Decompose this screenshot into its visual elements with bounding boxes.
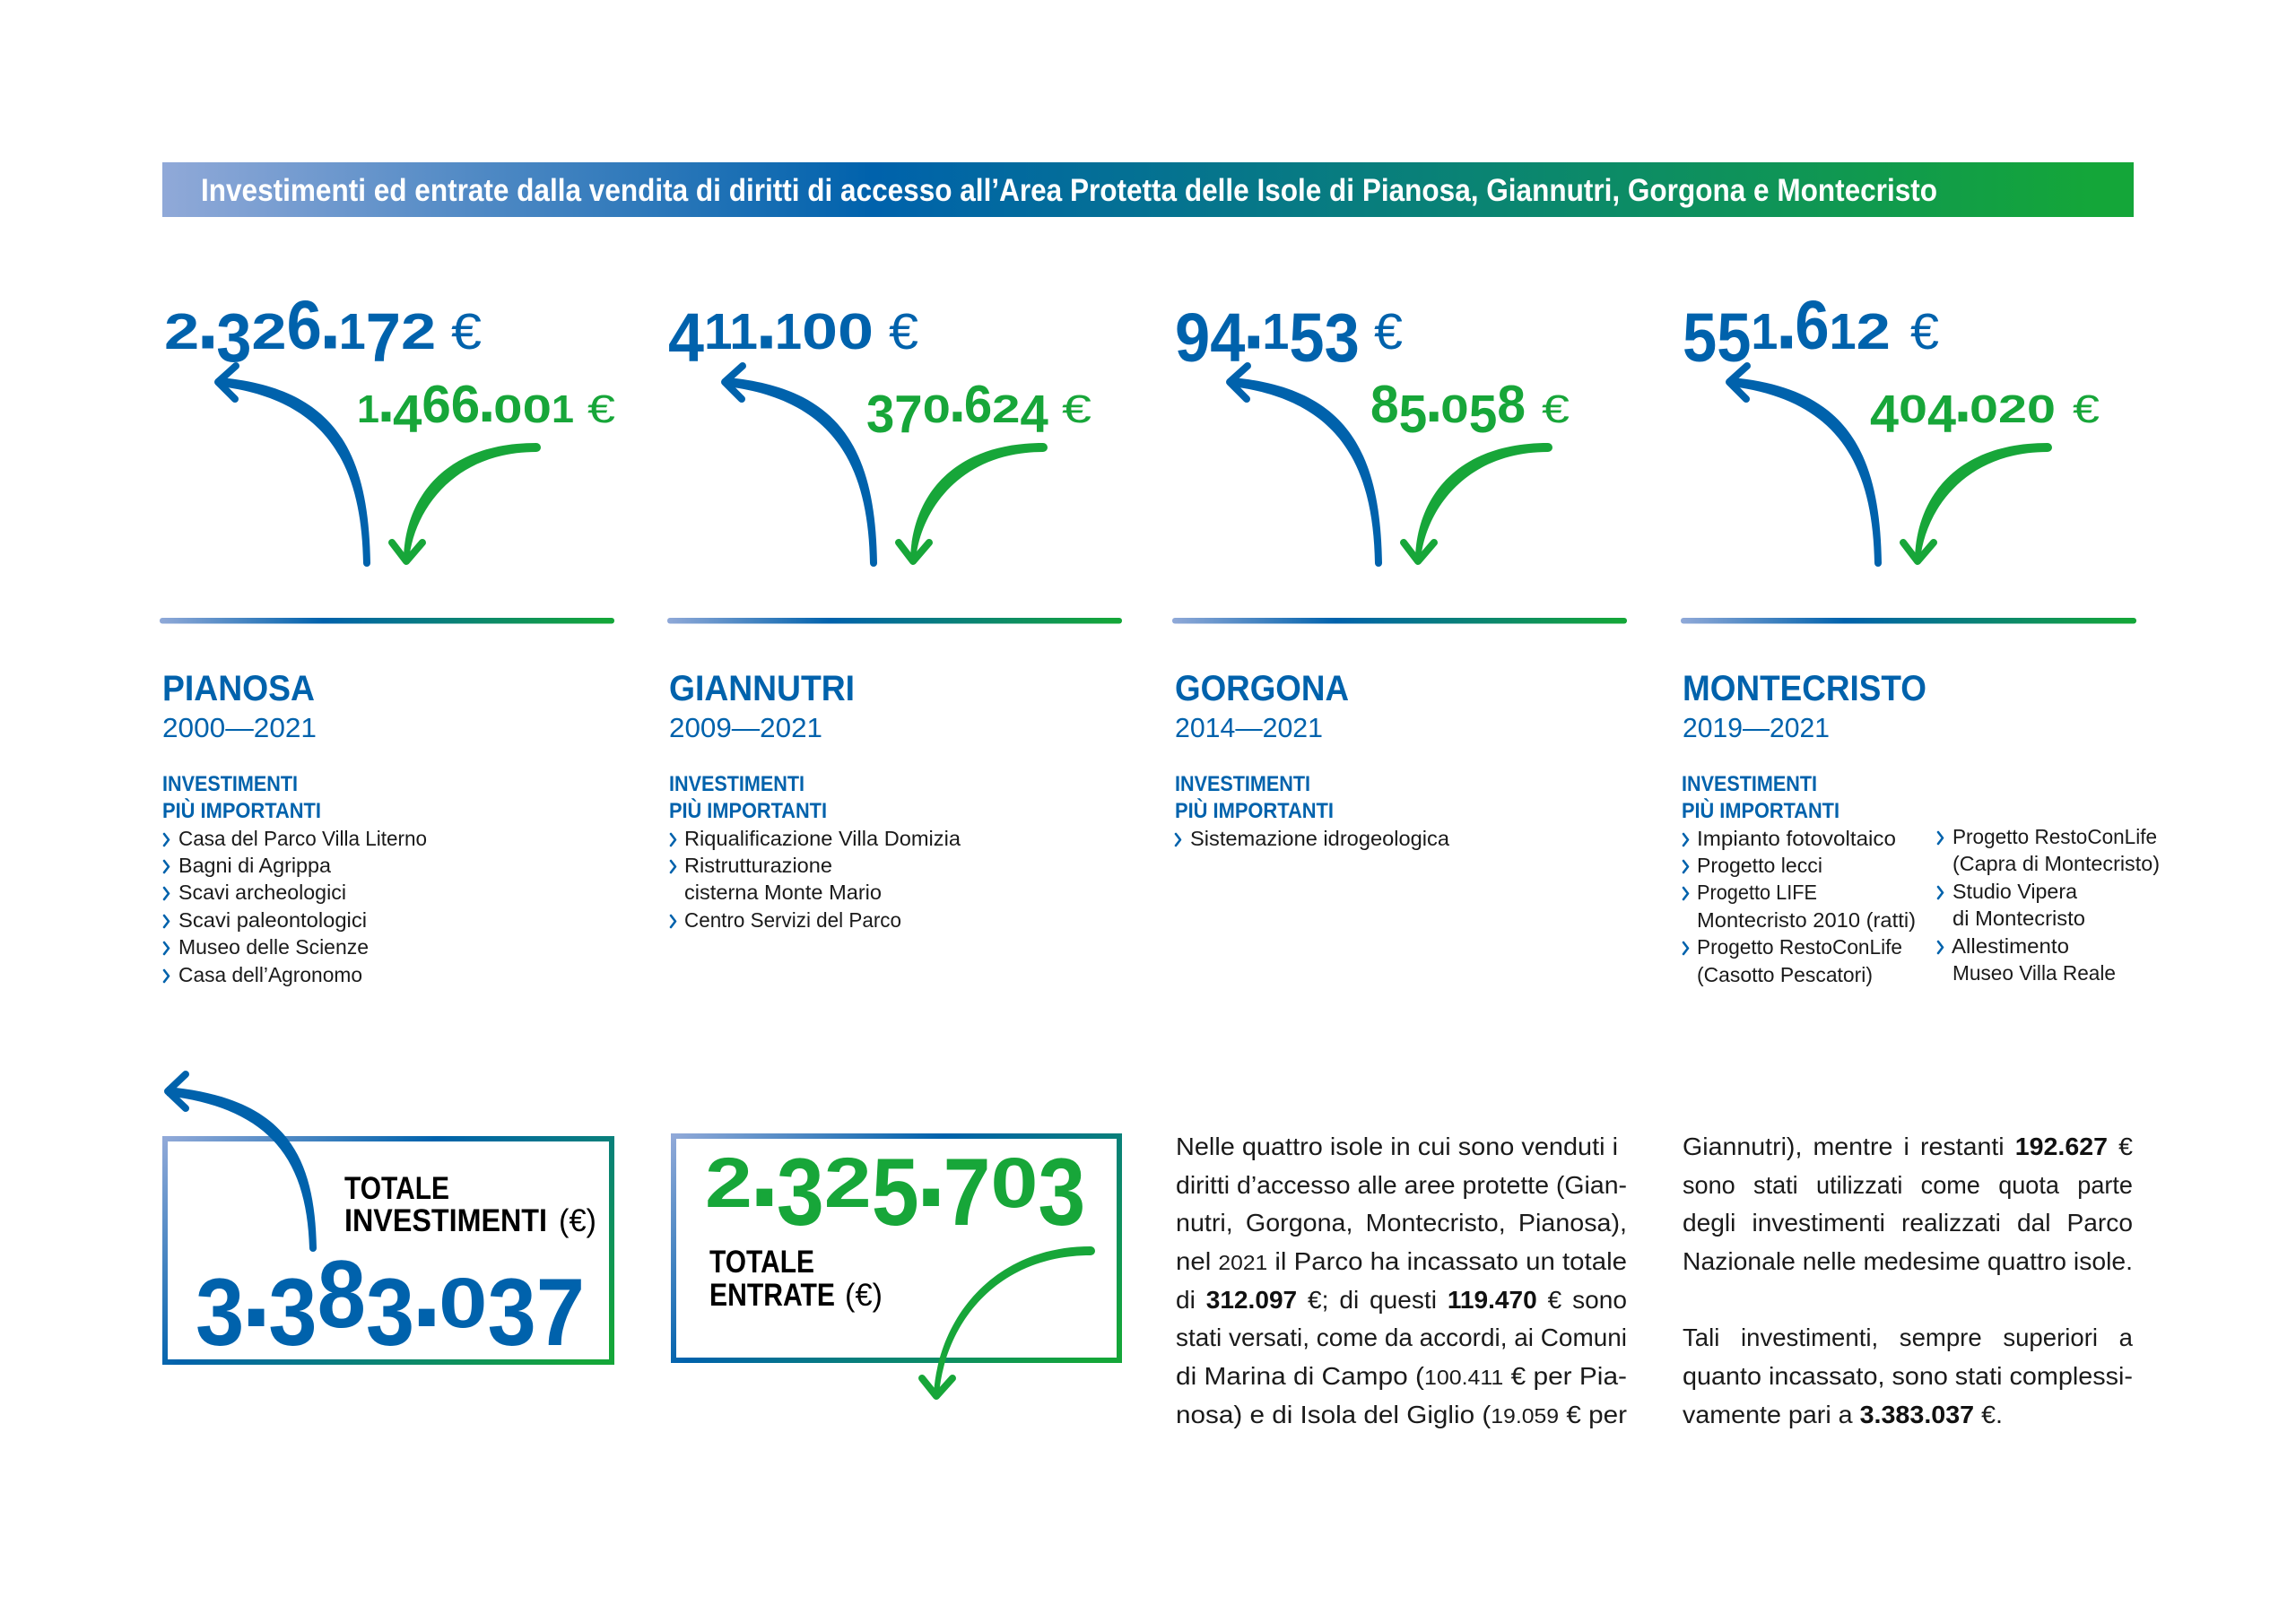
arrow: investments: [218, 366, 370, 567]
subheading: PIÙ IMPORTANTI: [162, 798, 321, 823]
total value: 3.383.037: [196, 1240, 585, 1366]
label: [344, 1171, 596, 1238]
investment list: Bagni di Agrippa: [178, 854, 331, 877]
investment list: second column: di Montecristo: [1952, 907, 2085, 930]
subheading: [162, 772, 321, 823]
text block: first column: Nelle quattro isole in cui sono venduti i: [1176, 1133, 1618, 1160]
arrow: revenue: [392, 443, 541, 561]
revenue amount: 404.020: [1870, 375, 2056, 444]
text block: first column: stati versati, come da accordi, ai Comuni: [1176, 1324, 1627, 1351]
investment list: first column: Progetto lecci: [1697, 854, 1822, 877]
investment list: Centro Servizi del Parco: [684, 908, 901, 932]
investment list: Scavi archeologici: [178, 881, 346, 904]
revenue amount: €: [1062, 387, 1091, 431]
text block: second column: Tali investimenti, sempre superiori a: [1683, 1324, 2134, 1351]
investment amount: 2.326.172: [164, 287, 436, 377]
text block: first column: diritti d’accesso alle aree protette (Gian-: [1176, 1171, 1627, 1199]
investment list: Museo delle Scienze: [178, 935, 369, 959]
arrow: investments: [1729, 366, 1882, 567]
subheading: INVESTIMENTI: [1175, 772, 1310, 796]
revenue amount: 1.466.00 1: [357, 374, 574, 444]
island name: PIANOSA: [162, 669, 315, 708]
investment amount: 551.612: [1683, 287, 1891, 377]
panel: Pianosa: [160, 287, 615, 986]
frame: [674, 1136, 1119, 1360]
text block: first column: di 312.097 €; di questi 119.470 € sono: [1176, 1286, 1627, 1314]
text block: second column: Nazionale nelle medesime quattro isole.: [1683, 1247, 2133, 1275]
text block: first column: di Marina di Campo ( 100.411 € per Pia-: [1176, 1362, 1627, 1390]
investment list: first column: (Casotto Pescatori): [1697, 963, 1873, 986]
revenue amount: €: [587, 387, 615, 431]
investment list: Scavi paleontologici: [178, 908, 367, 932]
investment list: [164, 827, 427, 986]
revenue amount: 85.058: [1370, 374, 1526, 444]
text block: first column: nel 2021 il Parco ha incassato un totale: [1176, 1247, 1627, 1275]
arrow: total investments: [167, 1074, 317, 1252]
investment amount: €: [1910, 303, 1939, 360]
label: (€): [845, 1278, 883, 1313]
text block: second column: degli investimenti realizzati dal Parco: [1683, 1209, 2133, 1237]
arrow: revenue: [899, 443, 1048, 561]
years: 2019—2021: [1683, 712, 1830, 743]
label: INVESTIMENTI: [344, 1203, 547, 1238]
label: (€): [559, 1203, 596, 1238]
label: TOTALE: [344, 1171, 449, 1206]
island name: GIANNUTRI: [669, 669, 855, 708]
investment list: cisterna Monte Mario: [684, 881, 882, 904]
revenue amount: €: [2073, 387, 2100, 431]
panel: Gorgona: [1172, 287, 1627, 850]
investment list: first column: Progetto RestoConLife: [1697, 935, 1902, 959]
investment list: first column: Montecristo 2010 (ratti): [1697, 908, 1916, 932]
investment list: second column: (Capra di Montecristo): [1952, 852, 2160, 875]
investment list: Ristrutturazione: [684, 854, 832, 877]
frame: [165, 1139, 612, 1362]
gradient rule: [160, 618, 614, 624]
years: 2000—2021: [162, 712, 317, 743]
panel: total revenue: [674, 1121, 1119, 1396]
subheading: INVESTIMENTI: [162, 772, 298, 796]
arrow: revenue: [1404, 443, 1552, 561]
investment list: first column: Impianto fotovoltaico: [1697, 827, 1896, 850]
arrow: revenue: [1903, 443, 2052, 561]
investment list: second column: Museo Villa Reale: [1952, 961, 2116, 985]
panel: Giannutri: [667, 287, 1122, 932]
investment list: [671, 827, 961, 932]
text block: first column: nutri, Gorgona, Montecristo, Pianosa),: [1176, 1209, 1627, 1237]
years: 2009—2021: [669, 712, 822, 743]
label: [709, 1245, 883, 1313]
subheading: PIÙ IMPORTANTI: [669, 798, 827, 823]
years: 2014—2021: [1175, 712, 1323, 743]
revenue amount: €: [1542, 387, 1570, 431]
label: TOTALE: [709, 1245, 814, 1280]
text block: second column: sono stati utilizzati come quota parte: [1683, 1171, 2133, 1199]
investment list: Casa del Parco Villa Literno: [178, 827, 427, 850]
total value: 2.325.703: [705, 1121, 1085, 1245]
investment list: Sistemazione idrogeologica: [1190, 827, 1449, 850]
panel: Montecristo: [1681, 287, 2160, 986]
text block: first column: [1176, 1133, 1627, 1428]
investment list: first column: Progetto LIFE: [1697, 881, 1817, 904]
investment amount: €: [889, 303, 918, 360]
subheading: PIÙ IMPORTANTI: [1682, 798, 1839, 823]
revenue amount: 370.624: [866, 374, 1048, 444]
investment amount: 94.153: [1175, 287, 1360, 377]
investment list: second column: Studio Vipera: [1952, 880, 2077, 903]
subheading: [1175, 772, 1334, 823]
text block: first column: nosa) e di Isola del Giglio ( 19.059 € per: [1176, 1401, 1627, 1428]
text block: second column: quanto incassato, sono stati complessi-: [1683, 1362, 2133, 1390]
label: ENTRATE: [709, 1278, 835, 1313]
subheading: [1682, 772, 1839, 823]
gradient rule: [1681, 618, 2136, 624]
text block: second column: vamente pari a 3.383.037 €.: [1683, 1401, 2003, 1428]
investment amount: €: [451, 303, 482, 360]
investment amount: 411.100: [668, 287, 874, 377]
investment list: second column: Allestimento: [1952, 934, 2069, 958]
arrow: investments: [725, 366, 877, 567]
investment amount: €: [1374, 303, 1403, 360]
subheading: [669, 772, 827, 823]
text block: second column: [1683, 1133, 2134, 1428]
title banner: [162, 162, 2134, 217]
subheading: INVESTIMENTI: [1682, 772, 1817, 796]
arrow: total revenue: [922, 1246, 1095, 1396]
subheading: INVESTIMENTI: [669, 772, 804, 796]
arrow: investments: [1230, 366, 1382, 567]
text block: second column: Giannutri), mentre i restanti 192.627 €: [1683, 1133, 2133, 1160]
gradient rule: [667, 618, 1122, 624]
investment list: second column: [1938, 825, 2160, 985]
gradient rule: [1172, 618, 1627, 624]
investment list: first column: [1683, 827, 1916, 986]
island name: MONTECRISTO: [1683, 669, 1926, 708]
investment list: Casa dell’Agronomo: [178, 963, 362, 986]
title banner: Investimenti ed entrate dalla vendita di diritti di accesso all’Area Protetta delle Isole di Pianosa, Giannutri, Gorgona e Montecristo: [201, 173, 1937, 208]
subheading: PIÙ IMPORTANTI: [1175, 798, 1334, 823]
investment list: second column: Progetto RestoConLife: [1952, 825, 2157, 848]
panel: total investments: [165, 1074, 612, 1366]
investment list: Riqualificazione Villa Domizia: [684, 827, 961, 850]
island name: GORGONA: [1175, 669, 1349, 708]
